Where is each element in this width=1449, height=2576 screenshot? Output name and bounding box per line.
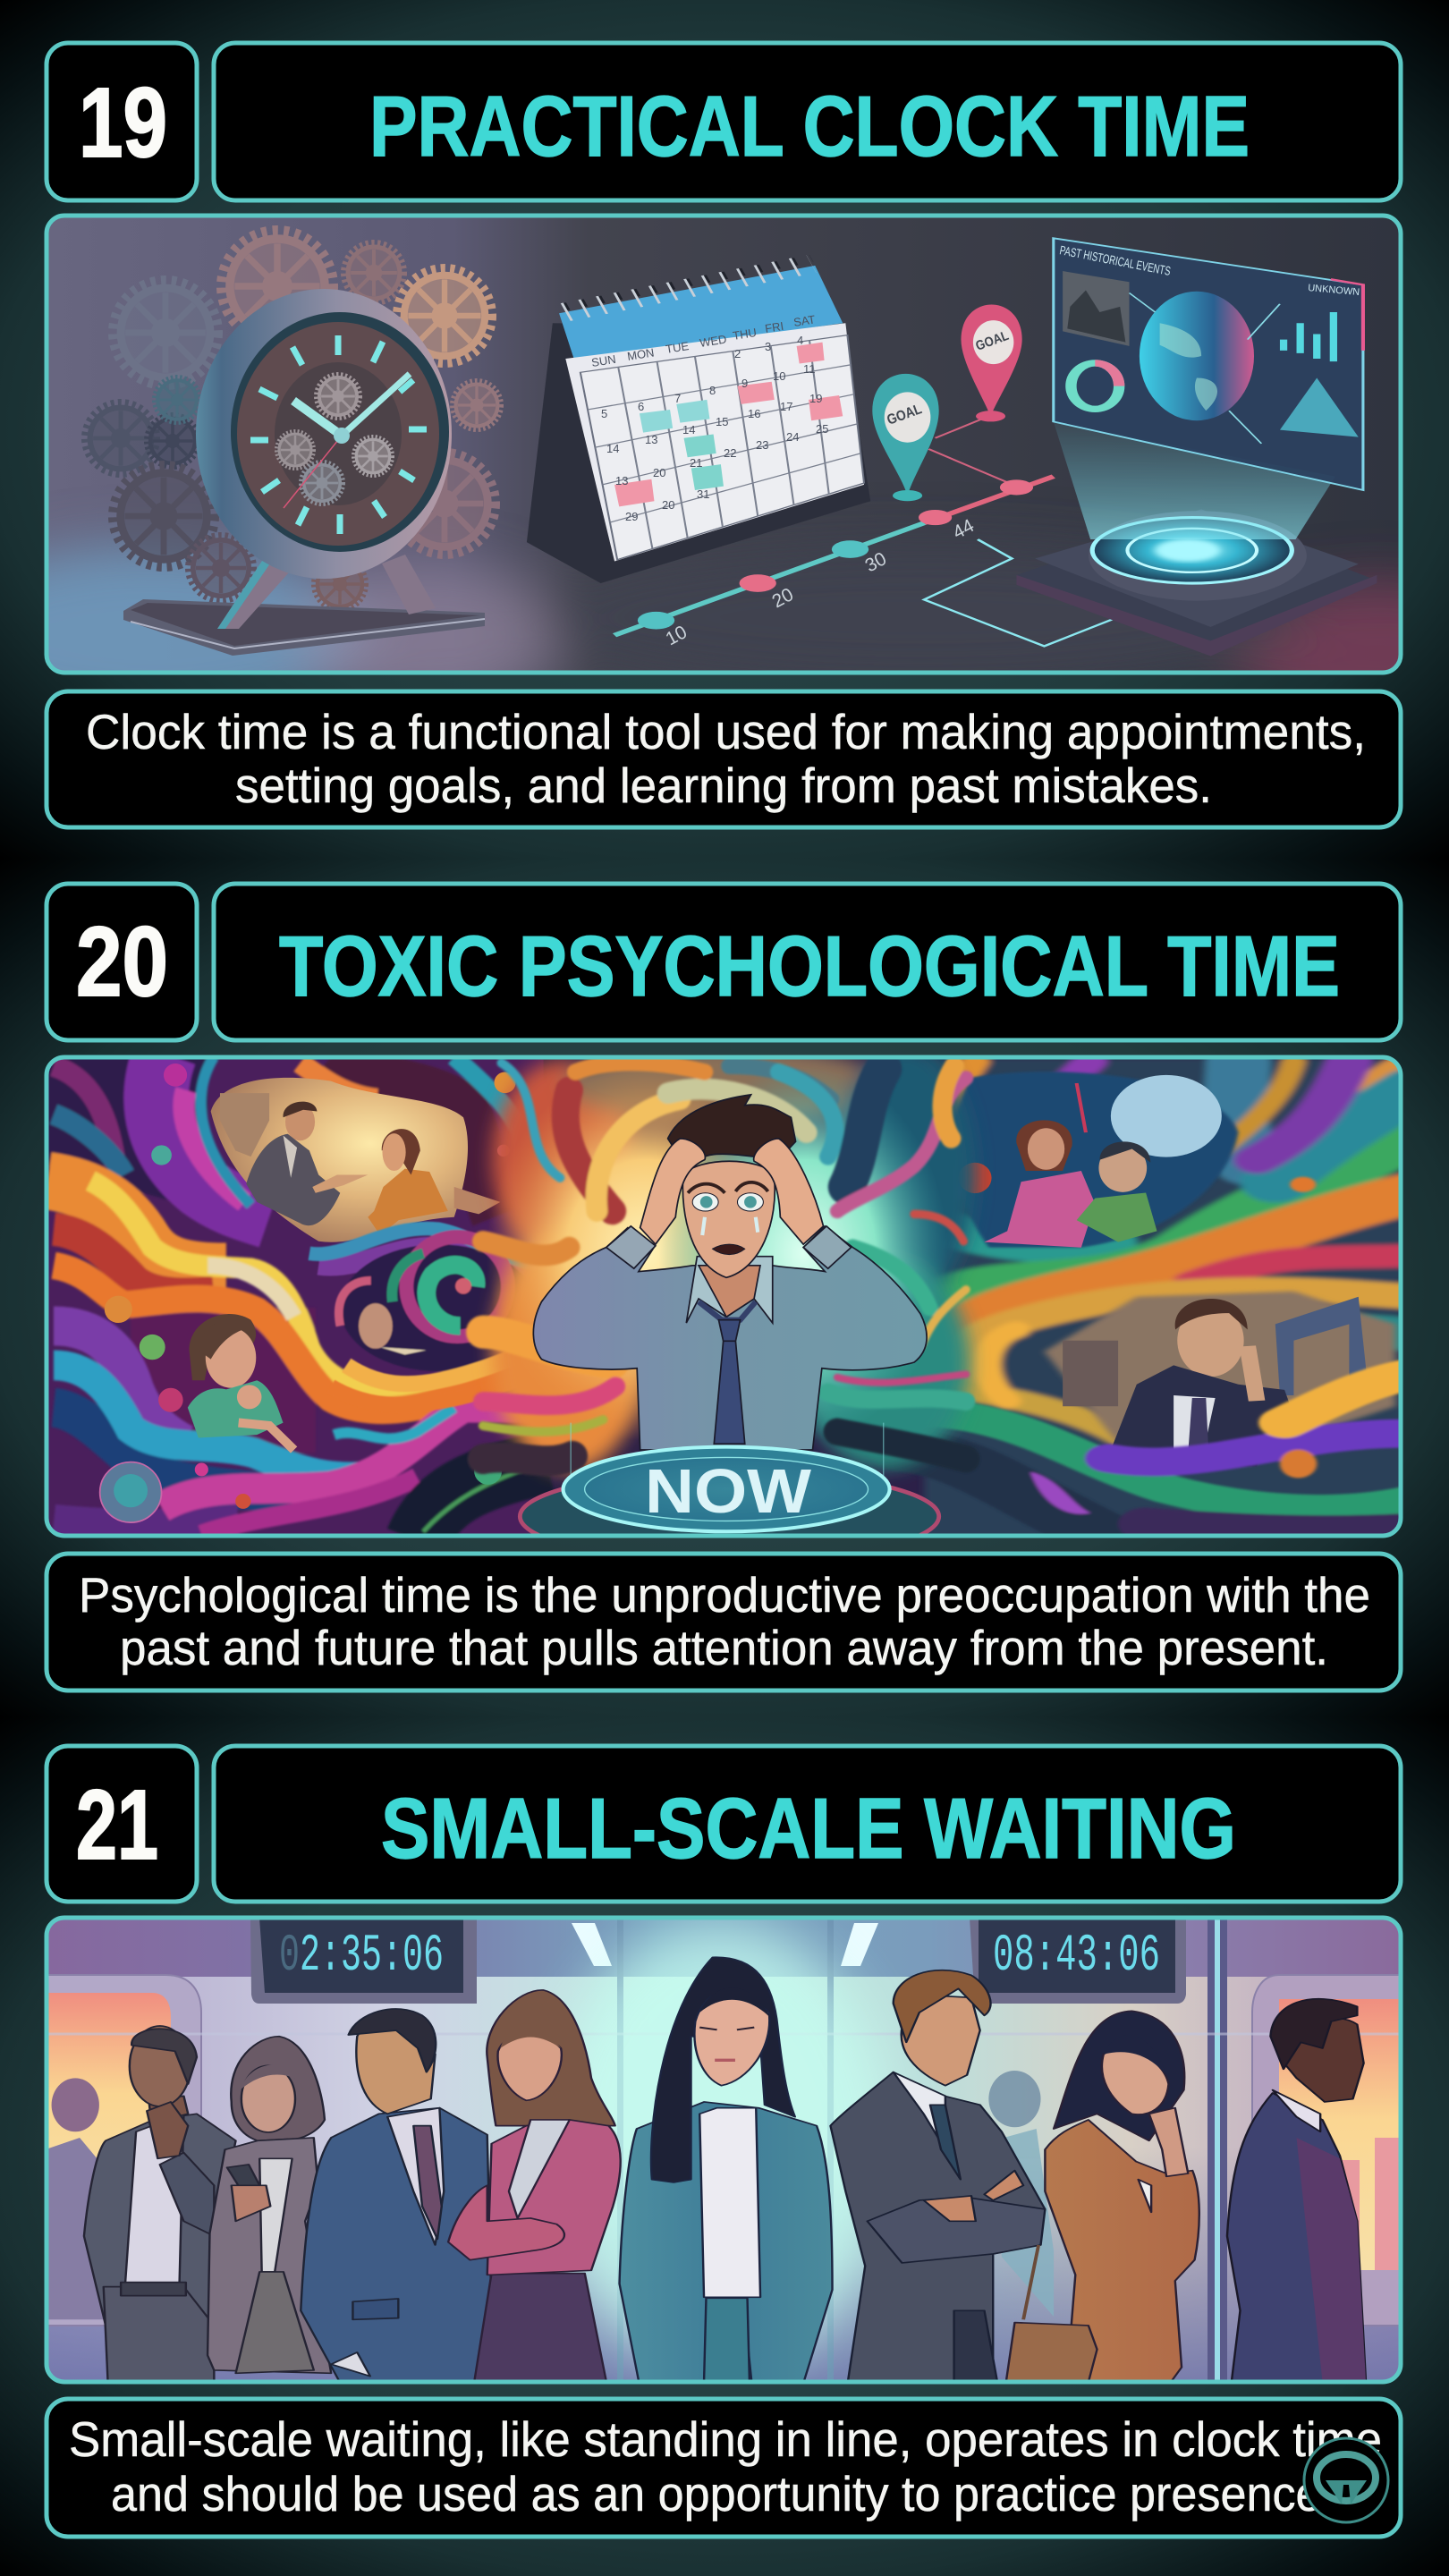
caption 19 bbox=[47, 691, 1401, 827]
calendar labels: SAT bbox=[792, 312, 817, 329]
hologram screen labels: PAST HISTORICAL EVENTS bbox=[1058, 242, 1172, 278]
wave and spiral bbox=[309, 1229, 547, 1405]
calendar labels: 17 bbox=[780, 400, 792, 413]
man in blue suit bbox=[301, 2009, 492, 2382]
central woman with eyes closed bbox=[620, 1957, 833, 2382]
icon: pink goal pin bbox=[961, 305, 1022, 421]
number badge 20 bbox=[47, 884, 197, 1040]
calendar labels: 25 bbox=[816, 422, 828, 436]
worried girl bbox=[188, 1314, 294, 1450]
caption 19: setting goals, and learning from past mistakes. bbox=[235, 758, 1212, 813]
hologram screen with globe and charts bbox=[1054, 238, 1363, 490]
vignette: mother and child bbox=[954, 1072, 1238, 1248]
icon: teal goal pin bbox=[872, 374, 939, 501]
right-side swirling ribbons bbox=[896, 1058, 1414, 1538]
caption 20 bbox=[47, 1554, 1401, 1690]
caption 21 bbox=[47, 2399, 1401, 2537]
hologram screen labels bbox=[1058, 242, 1360, 298]
number badge 21 bbox=[47, 1746, 197, 1902]
caption 19: Clock time is a functional tool used for making appointments, bbox=[86, 704, 1366, 759]
calendar labels: WED bbox=[699, 332, 727, 350]
calendar labels: 15 bbox=[716, 415, 728, 428]
title: small-scale waiting: SMALL-SCALE WAITING bbox=[381, 1781, 1236, 1877]
illustration: people waiting in a train carriage bbox=[45, 1918, 1401, 2382]
calendar labels: MON bbox=[626, 345, 655, 363]
illustration frame bbox=[47, 1057, 1401, 1536]
digital display right bbox=[970, 1918, 1186, 2004]
calendar labels: 22 bbox=[724, 446, 736, 460]
calendar labels: 9 bbox=[741, 377, 748, 390]
calendar labels: 3 bbox=[765, 340, 771, 353]
icon: gears behind clock bbox=[85, 230, 502, 610]
timeline bbox=[614, 416, 1054, 635]
number badge 21: 21 bbox=[76, 1770, 158, 1880]
goal pin labels: GOAL bbox=[886, 402, 924, 428]
section 21: small-scale waiting bbox=[45, 1746, 1401, 2537]
woman in pink cardigan bbox=[448, 1990, 621, 2382]
woman using phone bbox=[208, 2037, 331, 2373]
calendar labels: 29 bbox=[625, 510, 638, 523]
display clock left: 02:35:06 bbox=[279, 1928, 444, 1986]
calendar labels: TUE bbox=[665, 339, 690, 356]
calendar labels: 6 bbox=[638, 400, 644, 413]
icon: watermark logo bbox=[1304, 2438, 1388, 2522]
vignette: worried man with ruined city bbox=[1044, 1292, 1395, 1467]
number badge 19: 19 bbox=[79, 68, 167, 178]
man with hand on chin bbox=[84, 2026, 236, 2382]
carriage walls and windows bbox=[47, 1918, 1401, 2382]
section 20: toxic psychological time bbox=[45, 884, 1414, 1690]
calendar labels: 20 bbox=[662, 498, 674, 512]
calendar labels: 8 bbox=[709, 384, 716, 397]
calendar labels: 24 bbox=[786, 430, 799, 444]
caption 21: Small-scale waiting, like standing in line, operates in clock time bbox=[69, 2411, 1382, 2467]
number badge 20: 20 bbox=[76, 907, 168, 1017]
woman in tan blazer bbox=[1006, 2011, 1199, 2382]
illustration frame bbox=[47, 216, 1401, 673]
man in profile bbox=[1227, 1999, 1366, 2382]
timeline numbers: 44 bbox=[950, 515, 978, 543]
calendar labels: FRI bbox=[764, 319, 784, 335]
calendar labels: 31 bbox=[697, 487, 709, 501]
display clock right: 08:43:06 bbox=[993, 1928, 1160, 1986]
timeline numbers bbox=[663, 515, 978, 649]
number badge 19 bbox=[47, 43, 197, 200]
floating orbs bbox=[100, 1063, 516, 1522]
calendar labels: 20 bbox=[653, 466, 665, 479]
section 19: practical clock time bbox=[0, 43, 1449, 827]
NOW label: NOW bbox=[645, 1456, 811, 1526]
calendar labels: 13 bbox=[615, 474, 628, 487]
man with crossed arms bbox=[830, 1970, 1045, 2382]
title: small-scale waiting bbox=[214, 1746, 1401, 1902]
icon: mechanical clock bbox=[196, 289, 452, 579]
calendar labels bbox=[590, 312, 828, 523]
timeline numbers: 30 bbox=[862, 548, 890, 576]
background passenger right bbox=[988, 2071, 1054, 2317]
caption 21: and should be used as an opportunity to practice presence. bbox=[111, 2466, 1335, 2521]
goal pin labels: GOAL bbox=[974, 328, 1011, 354]
central swirl, glow and anxious man bbox=[483, 1045, 976, 1562]
illustration frame bbox=[47, 1918, 1401, 2382]
hologram beam bbox=[1054, 421, 1335, 539]
calendar labels: 10 bbox=[773, 369, 785, 383]
swirl strokes around the man bbox=[483, 1063, 966, 1461]
title: toxic psychological time bbox=[214, 884, 1401, 1040]
wire bbox=[924, 539, 1114, 646]
calendar labels: 7 bbox=[674, 392, 681, 405]
icon: clock stand bbox=[123, 555, 485, 656]
calendar labels: 16 bbox=[748, 407, 760, 420]
title: practical clock time bbox=[214, 43, 1401, 200]
calendar labels: 13 bbox=[645, 433, 657, 446]
hologram screen labels: UNKNOWN bbox=[1308, 283, 1360, 298]
title: practical clock time: PRACTICAL CLOCK TIME bbox=[369, 79, 1250, 174]
left-side swirling thoughts bbox=[45, 1054, 547, 1540]
calendar labels: 5 bbox=[601, 407, 607, 420]
hologram projector base bbox=[1016, 509, 1377, 656]
goal pin labels bbox=[886, 328, 1011, 428]
calendar labels: 19 bbox=[809, 392, 822, 405]
caption 20: past and future that pulls attention away from the present. bbox=[120, 1620, 1328, 1675]
background passenger left bbox=[45, 2078, 106, 2319]
anxious man bbox=[533, 1095, 927, 1450]
calendar labels: 11 bbox=[803, 362, 816, 376]
calendar labels: 2 bbox=[734, 347, 741, 360]
calendar labels: 23 bbox=[756, 438, 768, 452]
thought bubble: past argument bbox=[211, 1078, 500, 1242]
calendar labels: 14 bbox=[682, 423, 695, 436]
icon: desk calendar bbox=[527, 258, 870, 583]
calendar labels: 21 bbox=[690, 456, 702, 470]
calendar labels: 14 bbox=[606, 442, 619, 455]
timeline numbers: 10 bbox=[663, 622, 691, 649]
illustration: clock, calendar, goals and hologram bbox=[48, 218, 1399, 671]
calendar labels: SUN bbox=[590, 352, 617, 369]
glow behind central woman bbox=[550, 1923, 890, 2370]
timeline numbers: 20 bbox=[769, 584, 797, 612]
calendar labels: THU bbox=[732, 326, 758, 343]
calendar labels: 4 bbox=[797, 334, 803, 347]
NOW platform bbox=[520, 1423, 939, 1562]
digital display left bbox=[250, 1918, 477, 2004]
lower-right ribbons and orbs bbox=[878, 1177, 1414, 1538]
illustration: anxious man in swirling past and future thoughts bbox=[45, 1045, 1414, 1562]
caption 20: Psychological time is the unproductive preoccupation with the bbox=[79, 1567, 1370, 1623]
